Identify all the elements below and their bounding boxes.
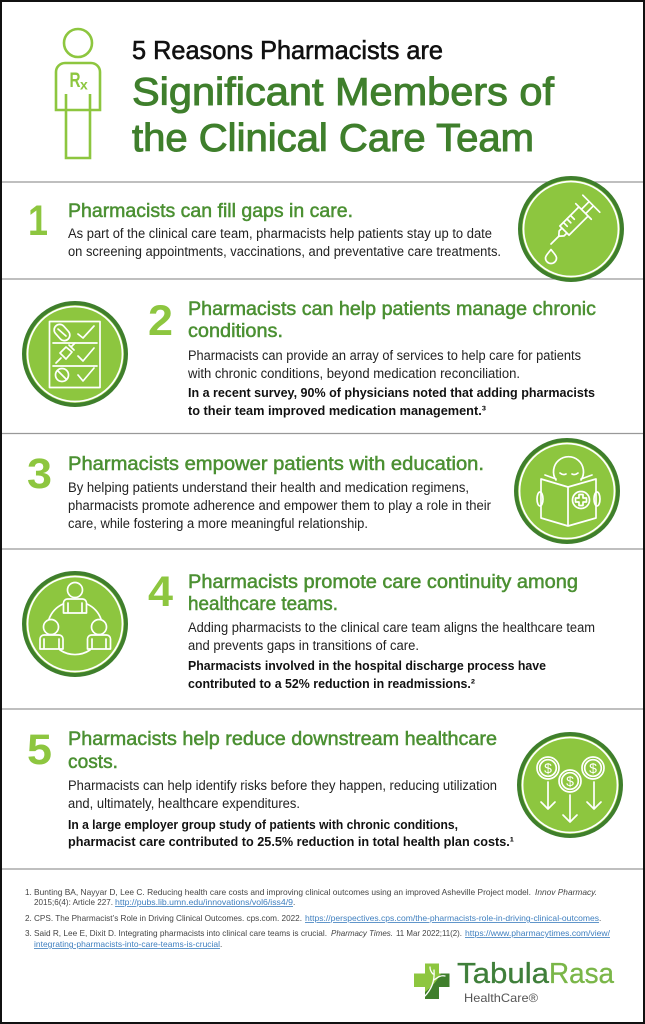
callout: 25.5% reduction: pharmacist care contributed to 25.5% reduction in total health plan costs.¹	[68, 834, 514, 849]
references: 2.	[25, 914, 32, 923]
body: reason 1: As part of the clinical care team, pharmacists help patients stay up to date	[68, 226, 492, 241]
body: reason 5	[68, 778, 497, 811]
references: 11 Mar 2022;11(2).	[396, 929, 462, 938]
heading: reason 1: Pharmacists can fill gaps in care.	[68, 200, 353, 222]
references: CPS. The Pharmacist’s Role in Driving Clinical Outcomes. cps.com. 2022.	[34, 914, 302, 923]
callout: 90% of physicians	[188, 385, 595, 418]
callout: 52% reduction	[188, 658, 546, 691]
body: reason 2: Pharmacists can provide an array of services to help care for patients	[188, 348, 581, 363]
icon: pharmacist figure: R	[70, 69, 80, 92]
heading: reason 2: Pharmacists can help patients manage chronic	[188, 298, 596, 320]
callout: 25.5% reduction	[68, 817, 514, 849]
heading: reason 4	[188, 571, 578, 615]
body: reason 1	[68, 226, 501, 259]
title: 5 Reasons Pharmacists are	[132, 35, 443, 65]
body: reason 4	[188, 620, 595, 653]
title	[132, 35, 554, 160]
body: reason 3	[68, 480, 491, 531]
number 4: 4	[148, 568, 173, 616]
icon: falling costs	[519, 734, 621, 836]
logo: TabulaRasa HealthCare: HealthCare®	[464, 991, 538, 1005]
icon: person reading book	[516, 440, 618, 542]
icon: falling costs: $	[544, 760, 552, 776]
icon: team circle	[24, 573, 126, 675]
body: reason 3: By helping patients understand their health and medication regimens,	[68, 480, 469, 495]
title: Significant Members of	[132, 71, 554, 114]
number 2: 2	[148, 297, 173, 345]
references: http://pubs.lib.umn.edu/innovations/vol6/iss4/9	[115, 898, 293, 907]
panel: reason 4	[24, 568, 595, 691]
references: .	[599, 914, 601, 923]
body: reason 3: care, while fostering a more meaningful relationship.	[68, 516, 368, 531]
references: 2015;6(4): Article 227.	[34, 898, 113, 907]
icon: falling costs: $	[589, 760, 597, 776]
references: 3.	[25, 929, 32, 938]
callout: 90% of physicians: to their team improved medication management.³	[188, 403, 487, 418]
references: Innov Pharmacy.	[535, 888, 597, 897]
icon: logo cross	[414, 964, 450, 999]
references: .	[220, 940, 222, 949]
heading: reason 5: costs.	[68, 751, 118, 773]
title: the Clinical Care Team	[132, 117, 534, 160]
logo: TabulaRasa HealthCare: Rasa	[549, 958, 615, 990]
references	[25, 888, 611, 949]
logo: TabulaRasa HealthCare: Tabula	[457, 958, 550, 990]
body: reason 3: pharmacists promote adherence and empower them to play a role in their	[68, 498, 491, 513]
body: reason 2: with chronic conditions, beyond medication reconciliation.	[187, 366, 520, 381]
icon: pharmacist figure: x	[80, 76, 88, 92]
references: Pharmacy Times.	[331, 929, 393, 938]
heading: reason 4: Pharmacists promote care continuity among	[188, 571, 578, 593]
body: reason 4: and prevents gaps in transitions of care.	[188, 638, 419, 653]
icon: falling costs: $	[566, 773, 574, 789]
panel: reason 2	[24, 297, 596, 418]
number 5: 5	[27, 726, 52, 774]
references: https://www.pharmacytimes.com/view/	[465, 929, 611, 938]
panel: reason 3	[27, 440, 618, 542]
body: reason 2	[187, 348, 581, 381]
body: reason 1: on screening appointments, vaccinations, and preventative care treatments.	[68, 244, 501, 259]
body: reason 4: Adding pharmacists to the clinical care team aligns the healthcare team	[188, 620, 595, 635]
heading: reason 2	[188, 298, 596, 342]
callout: 52% reduction: contributed to a 52% reduction in readmissions.²	[188, 676, 476, 691]
panel: reason 1	[28, 178, 622, 280]
icon: pharmacist figure	[56, 29, 100, 158]
icon: syringe	[520, 178, 622, 280]
heading: reason 4: healthcare teams.	[188, 593, 338, 615]
callout: 52% reduction: Pharmacists involved in the hospital discharge process have	[188, 658, 546, 673]
references: integrating-pharmacists-into-care-teams-is-crucial	[34, 940, 220, 949]
references: 1.	[25, 888, 32, 897]
number 1: 1	[28, 197, 48, 245]
icon: medication checklist	[24, 303, 126, 405]
heading: reason 5	[68, 728, 497, 773]
references: Bunting BA, Nayyar D, Lee C. Reducing health care costs and improving clinical outcomes using an improved Asheville Project model.	[34, 888, 531, 897]
callout: 25.5% reduction: In a large employer group study of patients with chronic conditions,	[68, 817, 458, 832]
references: https://perspectives.cps.com/the-pharmacists-role-in-driving-clinical-outcomes	[305, 914, 599, 923]
panel: reason 5	[27, 726, 621, 849]
references: Said R, Lee E, Dixit D. Integrating pharmacists into clinical care teams is crucial.	[34, 929, 327, 938]
heading: reason 5: Pharmacists help reduce downstream healthcare	[68, 728, 497, 750]
number 3: 3	[27, 450, 52, 498]
heading: reason 2: conditions.	[188, 320, 283, 342]
references: .	[293, 898, 295, 907]
body: reason 5: and, ultimately, healthcare expenditures.	[68, 796, 300, 811]
heading: reason 3: Pharmacists empower patients with education.	[68, 453, 484, 475]
body: reason 5: Pharmacists can help identify risks before they happen, reducing utilization	[68, 778, 497, 793]
callout: 90% of physicians: In a recent survey, 90% of physicians noted that adding pharmacists	[188, 385, 595, 400]
logo: TabulaRasa HealthCare	[414, 958, 615, 1005]
